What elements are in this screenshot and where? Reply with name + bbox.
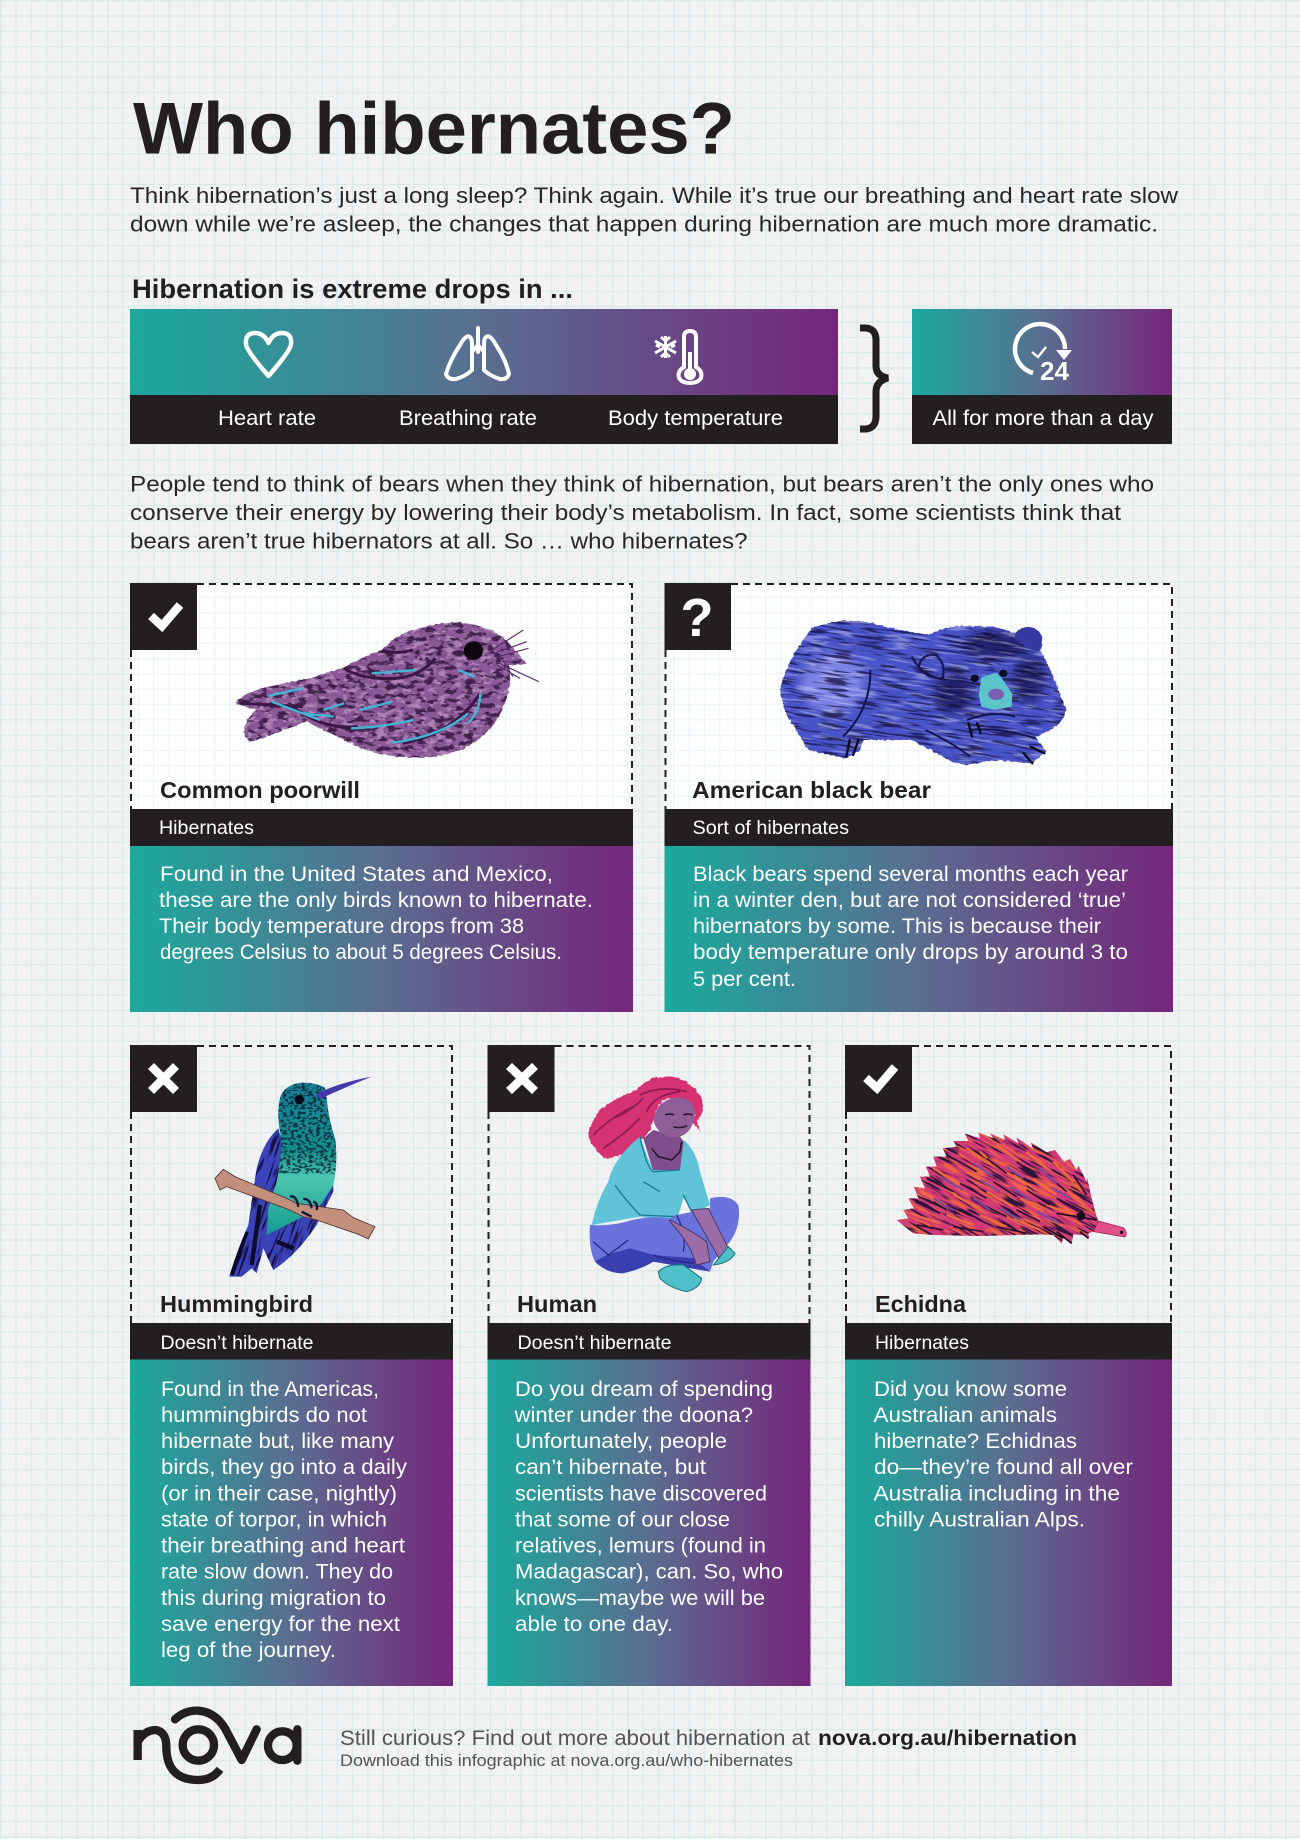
- description: hummingbirds do not: [161, 1404, 367, 1427]
- description: hibernate but, like many: [161, 1430, 395, 1453]
- description: this during migration to: [161, 1587, 386, 1610]
- description: state of torpor, in which: [161, 1508, 387, 1532]
- description: rate slow down. They do: [161, 1560, 393, 1584]
- shoes: [658, 1247, 735, 1292]
- description: Did you know some: [874, 1378, 1067, 1401]
- dashed border: [131, 1046, 452, 1323]
- icon: check badge: [130, 583, 197, 650]
- description: relatives, lemurs (found in: [515, 1534, 766, 1558]
- label: breathing rate: Breathing rate: [399, 407, 537, 430]
- description: Found in the Americas,: [161, 1378, 379, 1401]
- card background: [130, 583, 633, 809]
- label bar: [130, 395, 838, 444]
- description: save energy for the next: [161, 1613, 400, 1636]
- status bar: [130, 1323, 453, 1360]
- arms and hands: [670, 1208, 728, 1265]
- status: Doesn’t hibernate: [160, 1332, 314, 1354]
- bird feet: [290, 1196, 317, 1217]
- description: [874, 1378, 1133, 1532]
- panel: extreme drops: [130, 309, 838, 444]
- description: body temperature only drops by around 3 to: [693, 941, 1128, 964]
- description: Their body temperature drops from 38: [159, 915, 524, 938]
- illustration: poorwill: [231, 617, 539, 763]
- status bar: [488, 1323, 810, 1360]
- description panel: [488, 1360, 810, 1686]
- panel: american black bear: [664, 568, 1173, 1012]
- status bar: [845, 1323, 1172, 1360]
- description: Australian animals: [874, 1404, 1057, 1427]
- neck and chest: [643, 1130, 684, 1172]
- status: Sort of hibernates: [692, 817, 849, 839]
- description: [693, 863, 1128, 991]
- bear eyes: [971, 670, 1007, 682]
- description: do—they’re found all over: [874, 1456, 1133, 1479]
- intro paragraph: [130, 183, 1178, 236]
- brace: [860, 328, 888, 429]
- description: hibernate? Echidnas: [874, 1430, 1077, 1453]
- gradient band: [912, 309, 1172, 395]
- label: body temperature: Body temperature: [608, 407, 783, 430]
- section heading: Hibernation is extreme drops in ...: [132, 274, 573, 304]
- description panel: [845, 1360, 1172, 1686]
- icon: thermometer and snowflake: [655, 331, 701, 383]
- bear muzzle: [979, 673, 1012, 710]
- illustration: human: [588, 1077, 739, 1292]
- status: Hibernates: [159, 817, 254, 839]
- status bar: [130, 809, 633, 846]
- dashed border: [666, 584, 1172, 809]
- description: [159, 863, 593, 964]
- description: Found in the United States and Mexico,: [160, 863, 553, 886]
- description: degrees Celsius to about 5 degrees Celsius.: [160, 941, 562, 964]
- description: in a winter den, but are not considered ‘true’: [693, 889, 1126, 912]
- bear ears: [919, 627, 1042, 678]
- icon: cross badge: [488, 1045, 554, 1112]
- icon: 24 hour clock: 24: [1040, 356, 1070, 386]
- footer text: nova.org.au/hibernation: [818, 1726, 1077, 1750]
- description: their breathing and heart: [161, 1534, 405, 1558]
- paragraph: bears: conserve their energy by lowering their body’s metabolism. In fact, some scientists think that: [130, 500, 1121, 525]
- card background: [664, 583, 1173, 809]
- branch: [215, 1169, 375, 1239]
- description: these are the only birds known to hibernate.: [159, 889, 593, 912]
- description: (or in their case, nightly): [161, 1482, 397, 1506]
- name: Echidna: [875, 1291, 967, 1317]
- panel: hummingbird: [111, 1025, 453, 1686]
- description panel: [664, 846, 1173, 1012]
- intro paragraph: Think hibernation’s just a long sleep? Think again. While it’s true our breathing and heart rate slow: [130, 183, 1178, 208]
- illustration: echidna: [896, 1132, 1127, 1244]
- footer text: Download this infographic at nova.org.au/who-hibernates: [340, 1752, 793, 1770]
- dashed border: [131, 584, 632, 809]
- dashed border: [488, 1046, 810, 1323]
- paragraph: bears: [130, 472, 1154, 554]
- description: Black bears spend several months each year: [693, 863, 1128, 886]
- icon: heart: [246, 333, 291, 376]
- description: chilly Australian Alps.: [874, 1508, 1085, 1532]
- description: birds, they go into a daily: [161, 1456, 408, 1479]
- illustration: hummingbird: [214, 1076, 376, 1277]
- description: scientists have discovered: [515, 1482, 767, 1506]
- description: [513, 1378, 783, 1636]
- description: Madagascar), can. So, who: [515, 1560, 783, 1584]
- dashed border: [846, 1046, 1171, 1323]
- icon: lungs: [446, 328, 509, 379]
- name: Human: [517, 1291, 597, 1317]
- illustration: bear: [780, 620, 1066, 766]
- panel: echidna: [838, 1039, 1172, 1686]
- description: 5 per cent.: [693, 968, 796, 991]
- panel: common poorwill: [130, 583, 633, 1012]
- icon: cross badge: [130, 1045, 197, 1112]
- hair: [588, 1077, 703, 1158]
- status: Hibernates: [875, 1332, 969, 1354]
- paragraph: bears: bears aren’t true hibernators at all. So … who hibernates?: [130, 528, 748, 554]
- icon: question badge: [664, 583, 731, 650]
- description: can’t hibernate, but: [515, 1456, 706, 1479]
- description: Australia including in the: [874, 1482, 1120, 1506]
- description: able to one day.: [515, 1613, 673, 1636]
- icon: check badge: [845, 1045, 912, 1112]
- description panel: [130, 1360, 453, 1686]
- panel: human: [488, 1045, 810, 1686]
- panel: more than a day: [912, 309, 1172, 444]
- gradient band: [130, 309, 838, 395]
- description: hibernators by some. This is because their: [693, 915, 1101, 938]
- label bar: [912, 395, 1172, 444]
- logo: nova: [138, 1711, 297, 1780]
- shirt: [592, 1137, 710, 1225]
- trousers: [590, 1197, 739, 1273]
- description: [161, 1378, 408, 1662]
- name: Hummingbird: [160, 1291, 313, 1317]
- title: Who hibernates?: [133, 86, 735, 170]
- footer text: Still curious? Find out more about hibernation at: [340, 1726, 810, 1750]
- status bar: [664, 809, 1173, 846]
- description: Unfortunately, people: [515, 1430, 727, 1453]
- icon: 24 hour clock: [1015, 324, 1072, 386]
- intro paragraph: down while we’re asleep, the changes that happen during hibernation are much more dramatic.: [130, 212, 1158, 236]
- bear nose: [988, 689, 1004, 700]
- status: Doesn’t hibernate: [518, 1332, 672, 1354]
- paragraph: bears: People tend to think of bears when they think of hibernation, but bears aren’t the only ones who: [130, 472, 1154, 496]
- description: leg of the journey.: [161, 1639, 336, 1662]
- icon: question badge: ?: [680, 588, 714, 648]
- label: all for more than a day: All for more than a day: [932, 407, 1154, 430]
- description: that some of our close: [515, 1508, 730, 1532]
- name: Common poorwill: [160, 777, 360, 803]
- bear claws: [846, 723, 1044, 763]
- face: [653, 1098, 695, 1138]
- description: Do you dream of spending: [515, 1378, 773, 1401]
- label: heart rate: Heart rate: [218, 407, 316, 430]
- footer text: [340, 1726, 1077, 1770]
- description: knows—maybe we will be: [515, 1587, 765, 1610]
- description panel: [130, 846, 633, 1012]
- name: American black bear: [692, 777, 931, 803]
- description: winter under the doona?: [513, 1404, 753, 1427]
